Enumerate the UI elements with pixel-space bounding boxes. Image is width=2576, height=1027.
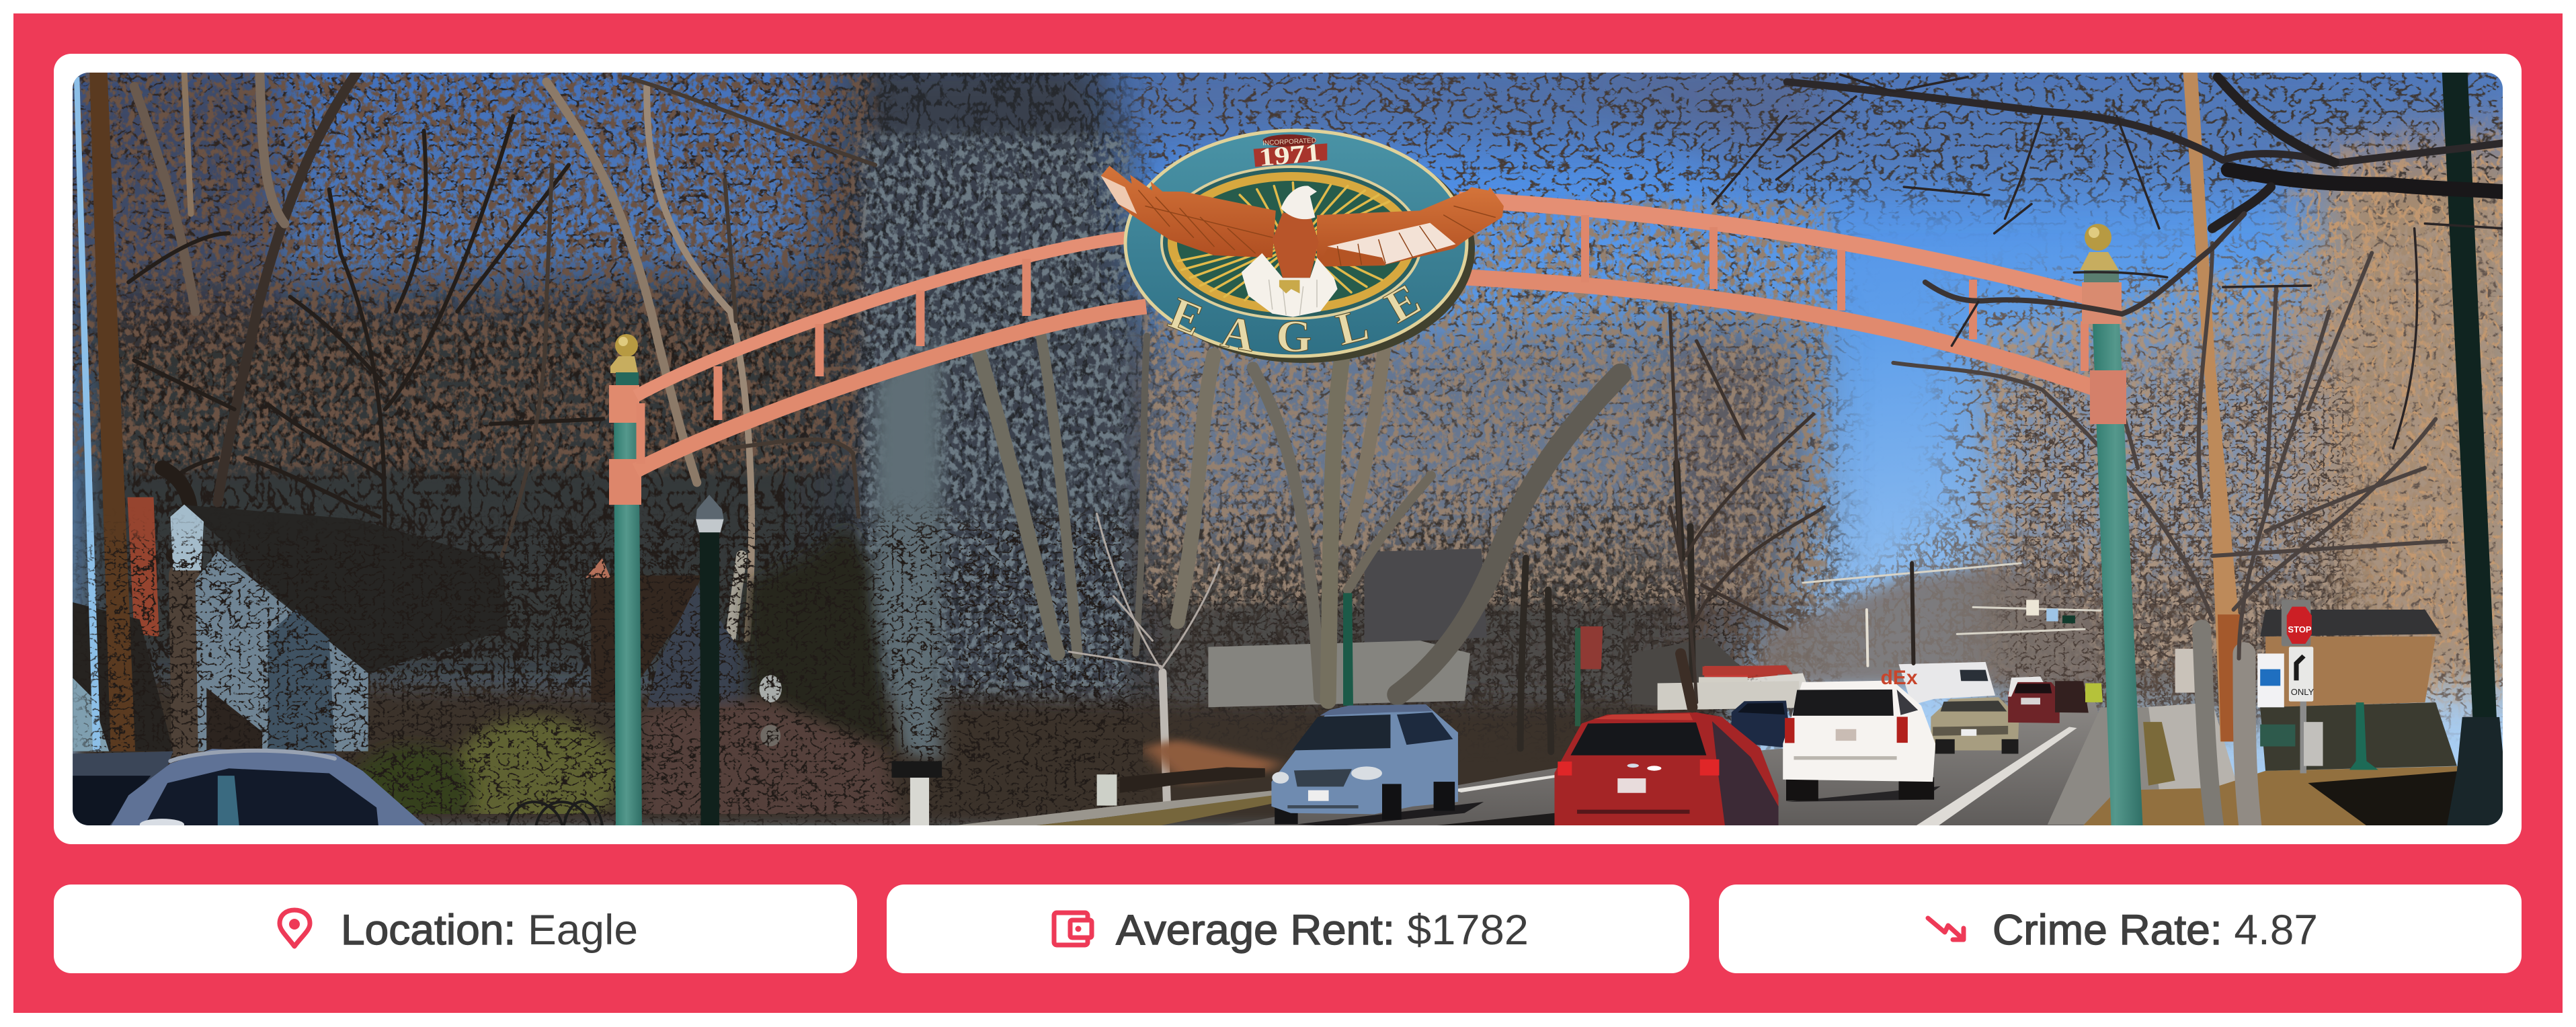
right green arch post (2080, 224, 2143, 833)
white feather band (1327, 223, 1456, 264)
finial collar (610, 356, 638, 373)
sparse bare-tree canopy (40, 40, 2541, 712)
left arch bands (636, 237, 1146, 470)
white dormer (170, 505, 204, 571)
left roof (73, 602, 173, 751)
left green arch post (609, 334, 642, 833)
brown leaf litter (1143, 739, 1278, 784)
dark far vehicle (2055, 681, 2089, 713)
green far car (2085, 684, 2103, 702)
upper sleeve (2082, 282, 2122, 324)
road surface (1220, 701, 2108, 827)
label: average rent: Average Rent: $1782 (1116, 907, 1529, 954)
yellow-green shrubs (452, 717, 619, 834)
left house (73, 72, 941, 834)
white SUV (1783, 681, 1935, 800)
foreground blue car (106, 749, 435, 834)
pale house wall (1208, 641, 1470, 707)
sky (73, 73, 2503, 825)
left grass strip (1027, 795, 1281, 827)
blue spruce (875, 341, 941, 761)
stop sign (2287, 607, 2312, 644)
grey tree trunks (2202, 629, 2215, 829)
branches crossing right post and top right (1712, 75, 2503, 448)
white head (1281, 186, 1317, 219)
post (614, 397, 642, 833)
upper sleeve (609, 385, 639, 423)
icon: map pin (280, 910, 310, 946)
photo: Eagle arch over street (40, 40, 2541, 834)
date text: 1971 (1258, 138, 1322, 172)
inner ring outline (1162, 167, 1421, 319)
centre trunks and pale house (980, 336, 1748, 806)
slate gable (647, 585, 761, 707)
only sign (2289, 647, 2313, 702)
satellite dishes (760, 675, 782, 702)
bare tree limbs (1893, 243, 2446, 659)
small pale street tree (1069, 514, 1219, 806)
street scene (947, 662, 2108, 827)
left wing (1101, 166, 1276, 257)
dark evergreen (747, 526, 892, 751)
left sidewalk (947, 790, 1278, 827)
right wing (1317, 187, 1504, 267)
gold ball finial (615, 334, 638, 357)
right arch bands (1459, 200, 2096, 388)
wooden utility pole (2183, 72, 2239, 741)
twig overlay blending the house, trees and ground (87, 376, 2353, 825)
lawn shadow (2308, 771, 2503, 829)
right-hand roof (591, 575, 702, 702)
lower sleeve (609, 459, 641, 505)
bench (2260, 725, 2295, 747)
blue minivan (1271, 704, 1458, 824)
teal disc (1125, 130, 1467, 356)
grey roof (1365, 548, 1487, 644)
icon: wallet (1054, 913, 1092, 945)
white far car (2008, 677, 2044, 697)
foreground left cars and bike rack (73, 749, 602, 834)
road lane lines (1451, 775, 1554, 792)
mailbox and post (892, 761, 1117, 828)
only sign text: ONLY (2291, 687, 2315, 697)
gold sedan (1931, 697, 2019, 753)
EAGLE lettering: L (1332, 298, 1373, 355)
traffic and road sign text (1880, 624, 2315, 697)
stop sign backing (2282, 600, 2310, 646)
incorporated banner (1262, 134, 1316, 147)
gold ball finial (2085, 224, 2111, 251)
incorporated text: INCORPORATED (1262, 137, 1316, 147)
EAGLE lettering: G (1277, 311, 1312, 362)
sunburst and eagle, drawn to sign coordinates (1101, 134, 1504, 317)
shop building (2175, 610, 2457, 771)
green street lamp (1343, 593, 1353, 706)
body (1273, 213, 1319, 278)
sign pole (2300, 700, 2306, 774)
red SUV far (2008, 682, 2060, 723)
white photo card (54, 54, 2522, 844)
EAGLE lettering: A (1217, 305, 1259, 362)
gold ring (1168, 172, 1415, 313)
1971 plate (1254, 143, 1327, 167)
parked dark sedan (1732, 701, 1792, 748)
traffic signals (2026, 600, 2075, 623)
lower sleeve (2090, 370, 2126, 424)
bike rack (508, 801, 602, 829)
far street trees (1697, 519, 2196, 707)
EAGLE lettering: E (1162, 287, 1210, 346)
gold talons (1279, 280, 1300, 294)
EAGLE lettering (1162, 274, 1428, 362)
pale wingtip (1101, 176, 1137, 214)
FedEx truck (1898, 662, 1995, 704)
post (2093, 323, 2143, 833)
stat chip: location (54, 885, 857, 973)
brick chimney (128, 497, 159, 636)
sidewalk (2143, 702, 2239, 790)
right black lamp post (2442, 72, 2497, 722)
EAGLE lettering: E (1377, 274, 1428, 333)
stat chip: crime rate (1719, 885, 2522, 973)
stop sign text: STOP (2288, 624, 2312, 634)
large left-side tree limbs (128, 67, 875, 751)
fine twig speckle (73, 73, 2503, 739)
sign shadow (1133, 134, 1475, 363)
finial collar (2080, 252, 2119, 270)
white wall (1658, 681, 1799, 710)
tonal haze of tree masses (73, 73, 2503, 750)
green inner field (1177, 181, 1406, 304)
grey car in foreground left (73, 751, 173, 829)
wooden utility pole (89, 72, 135, 751)
house siding (196, 551, 368, 751)
ground base behind the scene (73, 679, 1721, 833)
house roof (179, 505, 508, 673)
stat chip: average rent (887, 885, 1689, 973)
icon: trending down arrow (1928, 918, 1964, 940)
thin flag pole (74, 77, 101, 751)
FedEx lettering: dEx (1880, 667, 1918, 689)
dense tree masses (73, 73, 2503, 750)
right-side street furniture and trees (1670, 72, 2510, 829)
white tail (1242, 253, 1338, 317)
narrow grass strip (2143, 722, 2175, 786)
street lamp on the left (696, 495, 724, 829)
fence (1120, 767, 1265, 793)
label: location: Location: Eagle (341, 907, 638, 954)
red SUV (1554, 712, 1779, 827)
label: crime rate: Crime Rate: 4.87 (1993, 907, 2318, 954)
grass (2079, 766, 2503, 829)
Eagle emblem sign (1101, 130, 1504, 363)
small green lamp (2349, 702, 2378, 770)
wire lines (1803, 563, 2101, 634)
reddish shrubs (641, 698, 903, 829)
